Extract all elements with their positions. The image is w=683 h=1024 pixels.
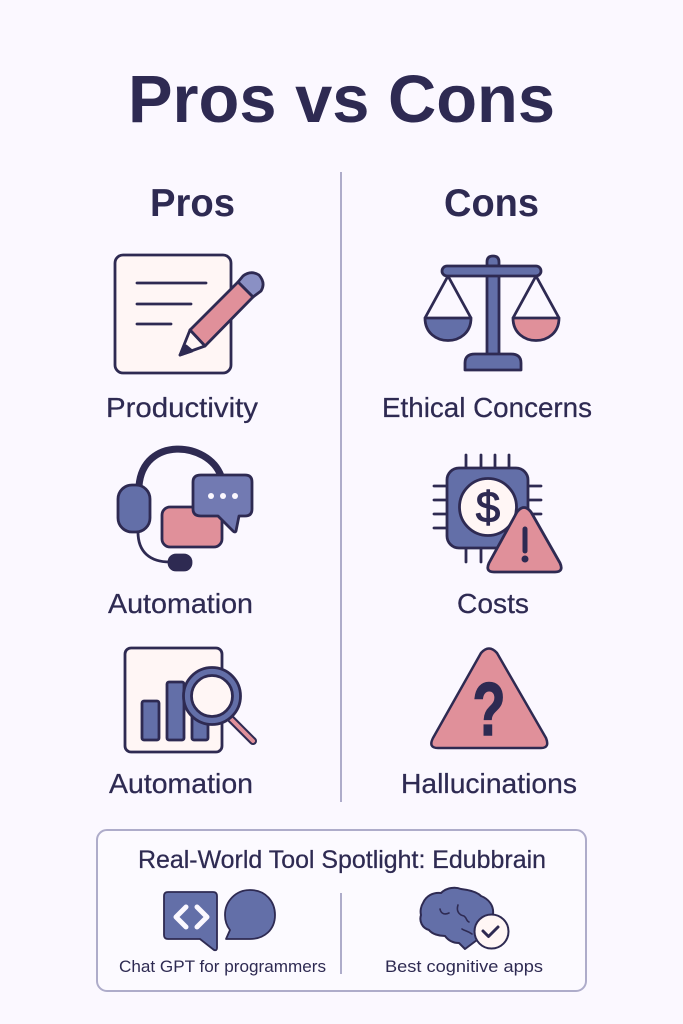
icon: code bubbles	[164, 890, 275, 950]
heading: cons: Cons	[444, 182, 539, 225]
icon: bar chart with magnifier	[125, 648, 253, 752]
label: automation: Automation	[108, 588, 253, 619]
panel heading: Real-World Tool Spotlight: Edubbrain	[138, 846, 546, 874]
panel divider	[340, 893, 342, 974]
panel: real-world tool spotlight	[97, 830, 586, 991]
label: automation second: Automation	[109, 768, 253, 799]
label: ethical concerns: Ethical Concerns	[382, 392, 592, 423]
icon: warning triangle with question mark	[431, 648, 547, 751]
icon: document and pencil	[115, 255, 263, 373]
center divider	[340, 172, 342, 802]
icon: headset with chat bubbles	[118, 449, 252, 570]
icon: chip with dollar and warning	[434, 455, 561, 572]
icon: chip with dollar and warning: $	[476, 483, 500, 532]
label: costs: Costs	[457, 588, 529, 619]
label: hallucinations: Hallucinations	[401, 768, 577, 799]
heading: pros: Pros	[150, 182, 235, 225]
icon: balance scale	[425, 256, 559, 370]
label: productivity: Productivity	[106, 392, 258, 423]
icon: warning triangle with question mark: ?	[472, 667, 506, 751]
label: chat gpt for programmers: Chat GPT for programmers	[119, 957, 326, 976]
title: Pros vs Cons	[128, 62, 555, 137]
label: best cognitive apps: Best cognitive apps	[385, 957, 543, 976]
icon: brain with check	[420, 888, 508, 949]
